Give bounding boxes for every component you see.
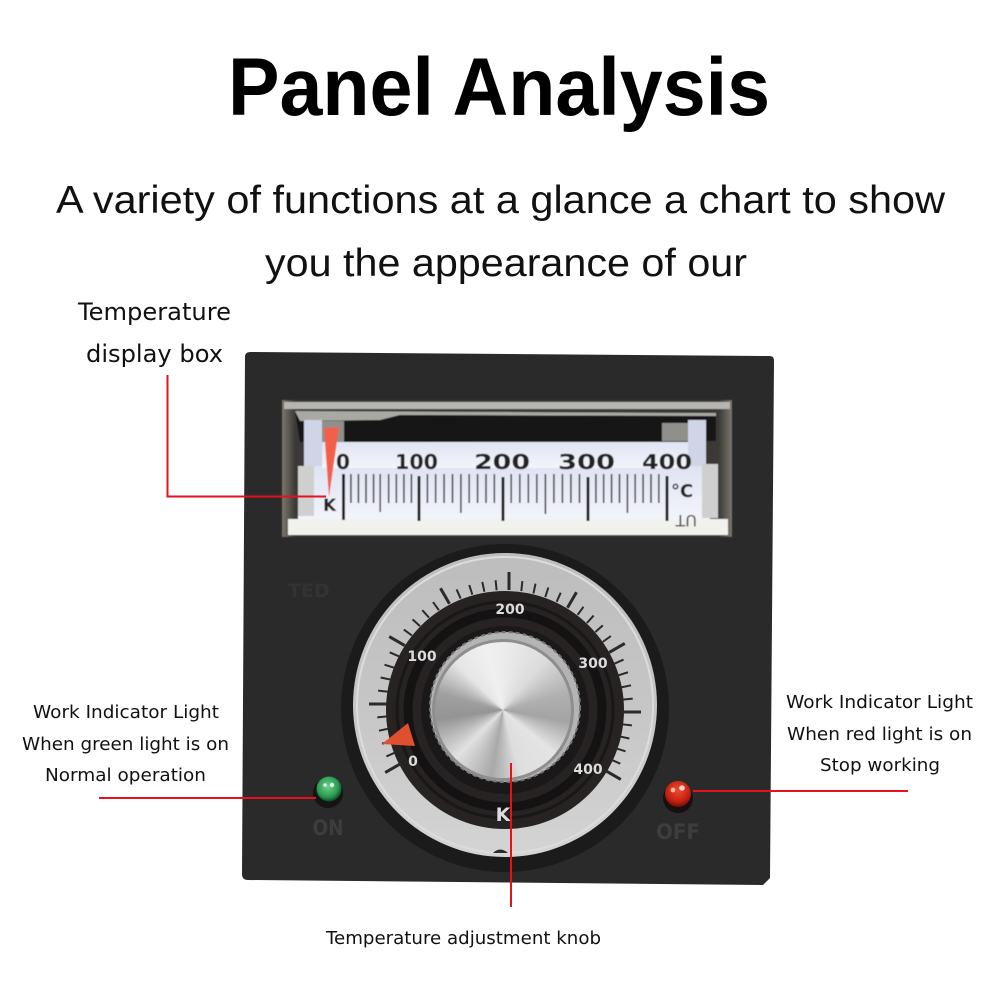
temperature display window [282, 400, 732, 537]
label: green work indicator: Normal operation [45, 765, 206, 786]
title: Panel Analysis [228, 42, 770, 133]
arrow: knob leader [510, 763, 512, 907]
label: red work indicator: Work Indicator Light [786, 692, 973, 713]
dial numbers: 400 [573, 762, 603, 778]
arrow: green light leader [99, 797, 316, 799]
dial [341, 544, 669, 872]
scale numbers: °C [671, 481, 693, 502]
dial numbers [407, 602, 608, 826]
subtitle [56, 179, 946, 285]
panel: temperature controller body [242, 352, 774, 885]
scale ticks [344, 474, 667, 521]
scale numbers: K [323, 496, 337, 516]
knob [430, 632, 580, 782]
dial numbers: 100 [407, 649, 437, 665]
subtitle: you the appearance of our [265, 242, 747, 285]
label: green work indicator [22, 702, 229, 786]
label: temperature display box: Temperature [77, 298, 231, 326]
label: red work indicator: When red light is on [787, 724, 972, 745]
label: green work indicator: Work Indicator Light [33, 702, 219, 723]
scale numbers: 200 [474, 450, 530, 474]
label: red work indicator [786, 692, 973, 776]
green indicator light [313, 776, 343, 808]
faint logo: TED [288, 580, 330, 602]
arrow: temperature display leader [168, 375, 326, 496]
label: temperature display box: display box [86, 340, 223, 368]
needle [324, 427, 339, 497]
dial numbers: 0 [408, 754, 418, 770]
label: green work indicator: When green light is on [22, 734, 229, 755]
label: red work indicator: Stop working [820, 755, 940, 776]
arrow: red light leader [693, 790, 908, 792]
label: temperature display box [77, 298, 231, 368]
scale numbers: UT [675, 511, 697, 530]
subtitle: A variety of functions at a glance a chart to show [56, 179, 946, 222]
scale numbers [323, 450, 697, 530]
dial ticks [369, 572, 641, 779]
scale numbers: 300 [558, 450, 615, 474]
scale numbers: 100 [395, 450, 438, 474]
red indicator light [663, 781, 693, 813]
scale numbers: 400 [642, 450, 692, 474]
dial numbers: 300 [578, 656, 608, 672]
dial numbers: 200 [495, 602, 525, 618]
scale numbers: 0 [336, 450, 350, 474]
label: temperature adjustment knob: Temperature adjustment knob [325, 928, 601, 949]
OFF label: OFF [656, 820, 700, 844]
pointer triangle [382, 723, 415, 746]
dial numbers: K [496, 804, 512, 826]
ON label: ON [312, 816, 344, 840]
